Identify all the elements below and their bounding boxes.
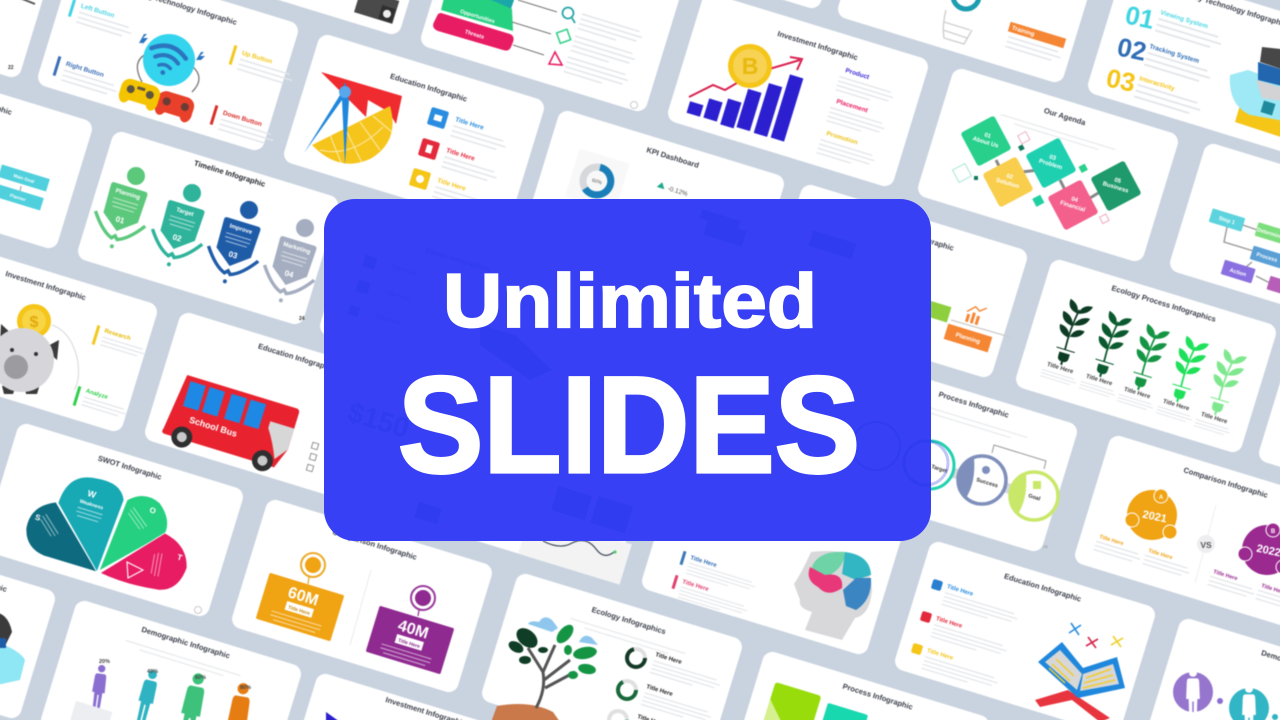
row: title here red <box>417 138 501 183</box>
item 05 <box>1090 160 1142 212</box>
row: yellow: Title Here <box>926 648 954 662</box>
icon: school bus: School Bus <box>188 415 238 439</box>
petal: strength: S <box>34 513 42 523</box>
step: success: Success <box>975 477 999 489</box>
title: Education Infographic <box>389 72 468 104</box>
connectors <box>1224 224 1272 284</box>
plant 2 <box>1079 309 1138 398</box>
panel: unlimited slides <box>324 199 948 541</box>
slide: timeline <box>76 129 340 327</box>
stat: change <box>656 181 689 198</box>
step: goal <box>1010 472 1058 520</box>
item 01: 01 <box>983 132 992 140</box>
page number: 25 <box>1043 544 1048 549</box>
label: left button <box>67 0 136 38</box>
ghost slide details: Title Here <box>374 314 401 327</box>
slide: flowchart right <box>1168 141 1280 339</box>
ghost slide details: Energy Infographics <box>424 247 491 274</box>
petal: weakness: W <box>86 488 98 500</box>
label: right button <box>52 56 121 96</box>
bracket <box>992 445 1046 469</box>
row: title here red: Title Here <box>445 147 476 163</box>
item 03 <box>1025 137 1077 189</box>
step: goal: Goal <box>1027 493 1041 503</box>
plant 2: Title Here <box>1085 374 1113 388</box>
label: research: Research <box>104 328 131 342</box>
title: Ecology Infographics <box>590 605 667 636</box>
title: Our Agenda <box>1043 106 1087 127</box>
label: right button: Right Button <box>65 61 105 79</box>
figure 60% <box>175 671 209 720</box>
petal: weakness <box>58 477 124 572</box>
item 02 <box>1115 32 1215 84</box>
step: target <box>143 184 212 274</box>
slide: gaming technology <box>36 0 300 153</box>
chart: 2021 <box>1125 489 1177 540</box>
slide: comparison 60m 40m <box>230 497 494 695</box>
plant 3: Title Here <box>1123 387 1151 401</box>
slide: investment bottom <box>280 671 544 720</box>
step: planning: Planning <box>115 188 141 201</box>
checklist <box>306 442 319 472</box>
icon: vr head <box>0 612 25 686</box>
flow boxes <box>0 164 50 211</box>
stat: change: -0.12% <box>667 185 689 198</box>
badge: vs <box>1197 535 1215 553</box>
petal: opportunities: O <box>148 505 157 516</box>
title: Investment Infographic <box>776 29 859 62</box>
decorative squares <box>953 132 1109 224</box>
plant 4: Title Here <box>1162 399 1190 413</box>
icon: warning <box>549 52 562 65</box>
slide: our agenda <box>916 66 1180 264</box>
connector lines <box>512 0 557 55</box>
petal: opportunities <box>99 496 168 571</box>
step: training <box>1003 22 1066 63</box>
petal: threats: T <box>176 553 183 563</box>
slide: bulb training <box>836 0 1100 85</box>
label: blue: Title Here <box>689 555 718 569</box>
label: analyze: Analyze <box>85 388 109 401</box>
chart: rising bars <box>687 74 803 142</box>
icon: open book <box>1035 642 1125 720</box>
title: KPI Dashboard <box>645 145 700 170</box>
icon: stars <box>1069 623 1123 648</box>
step: target: 02 <box>171 232 183 244</box>
label group: orange: Title Here <box>1098 534 1124 547</box>
slide: education school bus <box>143 310 407 508</box>
icon: piggy bank <box>0 304 78 394</box>
row: blue: Title Here <box>946 584 974 598</box>
chart: swot petals <box>26 477 187 590</box>
title: Ecology Process Infographics <box>1110 283 1217 324</box>
percentages: 60% <box>195 675 206 681</box>
slide: education book <box>893 539 1157 720</box>
slide: right edge card <box>1257 331 1280 529</box>
slide: education compass <box>282 32 546 230</box>
row: green donut <box>618 681 714 720</box>
row: title here blue: Title Here <box>454 116 485 132</box>
chart: pyramid: Threats <box>464 29 485 41</box>
title: Process Infographic <box>938 390 1010 420</box>
figure 80% <box>222 682 254 720</box>
percentages: 40% <box>147 669 158 675</box>
slide: investment piggy <box>0 236 159 434</box>
circle: teal person <box>1229 685 1269 720</box>
title: Education Infographic <box>1003 572 1082 604</box>
stat: 60m: Title Here <box>287 605 311 617</box>
slide: brain <box>640 459 904 657</box>
step: green box <box>909 296 951 322</box>
step: improve: 03 <box>227 249 239 261</box>
slide: swot <box>0 421 245 619</box>
step 4 <box>1221 260 1256 283</box>
slide: process circles <box>815 356 1079 554</box>
item 04: 04 <box>1070 196 1079 204</box>
slide: partial corner card <box>0 0 57 80</box>
flow boxes: Planner <box>9 193 27 202</box>
row: dark donut <box>627 649 723 693</box>
item 02: 02 <box>1005 173 1014 181</box>
label: promotion: Promotion <box>825 130 859 146</box>
row: bottom donut <box>609 711 665 720</box>
petal: weakness: Weakness <box>79 499 104 512</box>
step: target <box>906 441 954 489</box>
icon: bulb <box>943 0 979 44</box>
label: analyze <box>73 386 129 421</box>
icon: tree <box>490 617 598 720</box>
stat: 40m <box>366 586 454 674</box>
label: product <box>835 66 898 106</box>
step 1 <box>1209 208 1245 232</box>
title: SWOT Infographic <box>97 454 163 482</box>
step 2 <box>1255 222 1280 245</box>
row: title here yellow <box>408 168 492 213</box>
figure 40% <box>133 669 161 720</box>
page icon <box>630 102 638 108</box>
stat: 40m: 40M <box>396 617 430 643</box>
chart: 2021: A <box>1159 495 1164 501</box>
row: title here blue <box>426 107 510 152</box>
plant 5 <box>1194 347 1253 436</box>
slide: hidden card behind panel 1 <box>318 204 582 402</box>
icon: brain head <box>794 551 872 640</box>
ghost slide details: $150 <box>344 396 413 444</box>
slide: partial corner card: 22 <box>8 65 14 71</box>
flow boxes: Main Goal <box>13 173 35 184</box>
ghost slide details <box>344 209 948 533</box>
step 5 <box>1266 276 1280 296</box>
slide: comparison vs <box>1073 433 1280 631</box>
slide: flowchart left <box>0 53 94 251</box>
row: red <box>916 611 1010 659</box>
label: research <box>92 325 148 360</box>
step 1: Step 1 <box>1218 216 1235 226</box>
label: crimson <box>670 575 751 618</box>
slide: process bottom <box>727 649 991 720</box>
plant 1: Title Here <box>1046 362 1074 376</box>
title: Demographic Infographic <box>140 625 231 660</box>
page number <box>194 606 202 614</box>
label group: orange <box>1093 534 1193 577</box>
label: up button: Up Button <box>241 50 273 66</box>
item 02: Solution <box>995 178 1020 190</box>
item 02 <box>982 156 1034 208</box>
item 03: Interactivity <box>1138 75 1176 93</box>
page number: 24 <box>299 316 305 322</box>
petal: threats <box>100 533 187 590</box>
item 01: 01 <box>1123 0 1157 35</box>
item 01 <box>1123 0 1226 50</box>
row: dark donut: Title Here <box>654 652 683 666</box>
item 02: 02 <box>1115 32 1149 67</box>
stat: 60m <box>256 553 344 641</box>
plant 3 <box>1117 322 1176 411</box>
row: green donut: Title Here <box>645 684 674 698</box>
step: planning: 01 <box>114 214 126 226</box>
label: placement <box>826 97 889 137</box>
icon: chart <box>964 303 987 326</box>
connector band <box>950 472 1014 490</box>
step: planning <box>944 324 992 352</box>
icon: school bus <box>159 373 300 478</box>
item 02: Tracking System <box>1148 43 1200 65</box>
item 01 <box>960 115 1012 167</box>
chart: pyramid <box>433 0 516 51</box>
label: blue <box>678 551 759 594</box>
ghost slide details: Title Here <box>383 290 410 303</box>
step: marketing: 04 <box>283 268 295 280</box>
item 03: 03 <box>1048 154 1057 162</box>
label box <box>70 701 112 720</box>
icon: blue arrow <box>326 712 340 720</box>
percentages: 80% <box>240 685 251 691</box>
row: red: Title Here <box>935 616 963 630</box>
slide: kpi dashboard <box>522 108 786 306</box>
slide: vr partial left <box>0 523 57 720</box>
arrow <box>689 57 802 97</box>
petal: strength <box>26 502 97 572</box>
chart: 2022 <box>1238 523 1280 575</box>
step: lime tile <box>761 682 821 720</box>
icon: bitcoin <box>728 44 772 88</box>
row: yellow <box>907 643 1001 691</box>
icon: map <box>557 29 571 43</box>
text lines <box>564 14 643 90</box>
step: training: Training <box>1011 25 1035 38</box>
ghost slide details: Title Here <box>390 265 417 278</box>
slide: ecology process <box>1014 257 1278 455</box>
step: target: Target <box>930 464 948 475</box>
connectors <box>996 160 1100 198</box>
item 03: Problem <box>1038 159 1063 171</box>
step: improve: Improve <box>229 223 253 236</box>
label: placement: Placement <box>835 98 869 115</box>
chart tile and line <box>518 513 632 585</box>
percentages: 20% <box>99 659 110 665</box>
item 01: Viewing System <box>1159 9 1209 30</box>
figure 20% <box>90 664 108 712</box>
label: up button <box>228 45 297 85</box>
chart: 2021: 2021 <box>1141 509 1168 525</box>
title: Comparison Infographic <box>331 527 418 562</box>
label group: orange: Title Here <box>1147 548 1173 561</box>
step: target: Target <box>175 207 194 218</box>
item 04 <box>1047 179 1099 231</box>
row: blue <box>927 579 1021 627</box>
step: planning <box>86 167 155 256</box>
slide: demographic <box>39 598 303 720</box>
title: Timeline Infographic <box>193 158 266 189</box>
percentages <box>99 659 251 691</box>
stat: 60m: 60M <box>286 584 320 610</box>
label group: purple <box>1207 569 1280 612</box>
title: Investment Infographic <box>4 269 87 302</box>
slide: demographic right <box>1143 616 1280 720</box>
icon: wifi and gamepads <box>117 34 205 124</box>
icon: piggy bank: $ <box>30 314 39 331</box>
label: crimson: Title Here <box>681 579 710 593</box>
item 05: Business <box>1102 181 1130 195</box>
title: Comparison Infographic <box>1182 465 1269 500</box>
chart: donut <box>565 149 629 212</box>
plant 1 <box>1040 297 1099 386</box>
step 3 <box>1250 246 1280 268</box>
step: teal tile <box>816 703 868 720</box>
slide: process planning <box>765 182 1029 380</box>
label: down button <box>209 105 278 145</box>
label: left button: Left Button <box>80 3 115 20</box>
circle: purple person <box>1173 669 1213 719</box>
step: marketing <box>255 219 324 310</box>
label group: purple: Title Here <box>1212 569 1238 582</box>
step: planning: Planning <box>955 332 981 346</box>
title: Process Infographic <box>842 682 914 712</box>
item 03 <box>1104 63 1205 116</box>
slide: hidden card behind panel 2 <box>563 278 827 476</box>
slide: hidden card behind panel 3 <box>388 385 652 585</box>
item 05: 05 <box>1113 177 1122 185</box>
chart: pyramid: Opportunities <box>459 9 495 25</box>
chart: 2022: B <box>1271 529 1276 535</box>
label: product: Product <box>844 67 871 81</box>
heading: slides: SLIDES <box>398 349 860 502</box>
title: Process Infographic <box>883 223 955 253</box>
slide: ecology tree <box>480 571 744 720</box>
plant 4 <box>1156 334 1215 423</box>
slide: matrix pyramid <box>419 0 683 114</box>
slide: vr technology <box>1086 0 1280 161</box>
dot <box>1217 698 1223 704</box>
slide: top card <box>593 0 857 11</box>
step 3: Process <box>1256 252 1278 264</box>
slide: investment bitcoin <box>666 0 930 189</box>
heading: unlimited: Unlimited <box>443 259 817 344</box>
step: success <box>958 456 1006 504</box>
item 03: 03 <box>1104 63 1138 98</box>
step: marketing: Marketing <box>282 242 311 256</box>
label: promotion <box>816 129 879 169</box>
label: down button: Down Button <box>222 110 263 128</box>
title: Education Infographic <box>257 342 336 374</box>
item 01: About Us <box>972 136 1000 150</box>
step: improve <box>199 201 268 291</box>
badge: vs: VS <box>1200 540 1212 550</box>
dot <box>1272 714 1278 720</box>
icon: magnifier <box>562 8 575 23</box>
step 4: Action <box>1229 268 1247 279</box>
icon: wallet <box>354 0 399 24</box>
icon: vr headset <box>1230 47 1280 140</box>
slide: wallet top <box>173 0 437 37</box>
stat: 40m: Title Here <box>397 638 421 650</box>
item 04: Financial <box>1059 200 1086 214</box>
row: title here yellow: Title Here <box>436 177 467 193</box>
icon: compass and protractor <box>304 72 402 165</box>
chart: donut: 60% <box>591 178 603 186</box>
icon: bitcoin: B <box>742 53 758 79</box>
plant 5: Title Here <box>1200 412 1228 426</box>
